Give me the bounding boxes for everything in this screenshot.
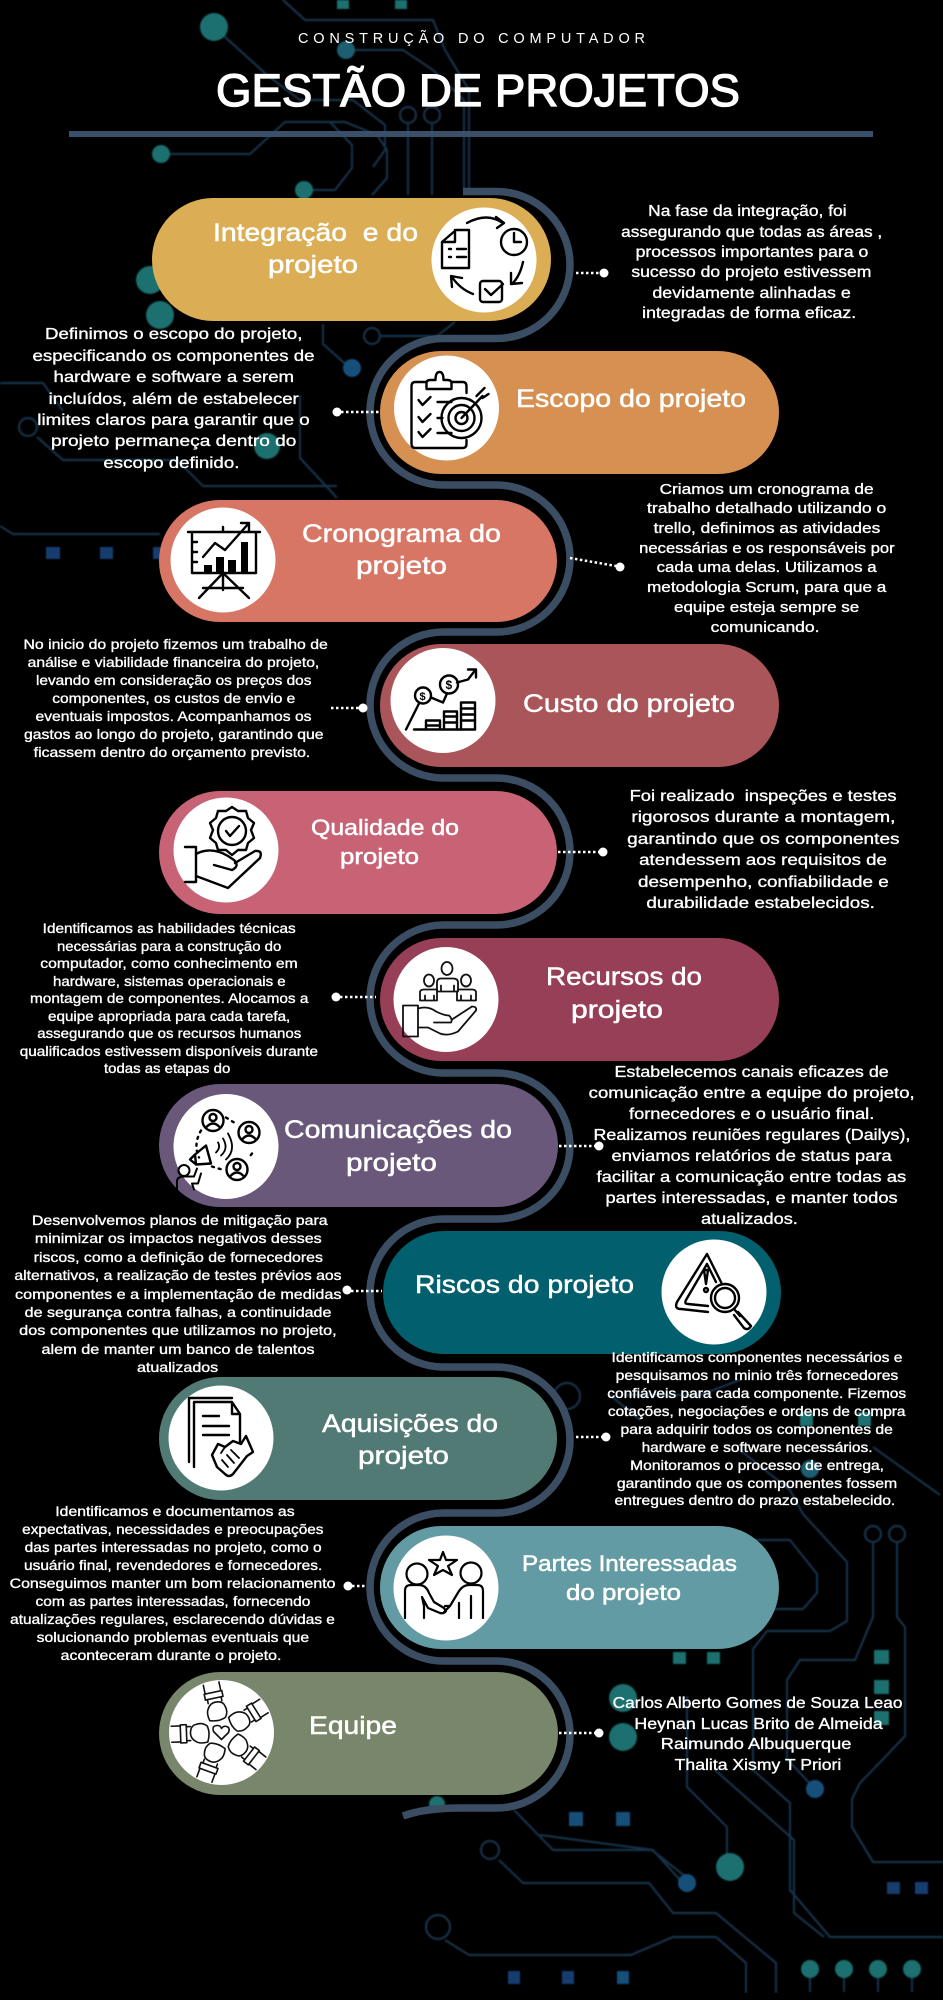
- pill: [152, 198, 551, 321]
- panel: Qualidade: [159, 788, 900, 914]
- description: Estabelecemos canais eficazes de: [614, 1064, 889, 1081]
- team names: Raimundo Albuquerque: [661, 1736, 852, 1753]
- pill heading: [546, 963, 702, 1024]
- panel: Comunicações: [159, 1064, 915, 1228]
- description: usuário final, revendedores e fornecedores.: [24, 1557, 322, 1573]
- description: confiáveis para cada componente. Fizemos: [607, 1385, 906, 1401]
- description: escopo definido.: [103, 455, 239, 472]
- icon: integration cycle: [432, 208, 536, 312]
- description: equipe apropriada para cada tarefa,: [48, 1008, 290, 1024]
- pill: [383, 1231, 781, 1354]
- team names: Heynan Lucas Brito de Almeida: [634, 1716, 883, 1733]
- description: Monitoramos o processo de entrega,: [630, 1457, 884, 1473]
- pill heading: Cronograma do: [302, 520, 501, 548]
- icon: stakeholders handshake and star: [394, 1536, 498, 1640]
- description: [589, 1064, 915, 1228]
- description: componentes, os custos de envio e: [52, 690, 296, 706]
- pill heading: projeto: [356, 552, 447, 580]
- description: [14, 1212, 342, 1375]
- connector: [331, 704, 368, 712]
- description: trello, definimos as atividades: [654, 520, 880, 537]
- description: [20, 920, 318, 1076]
- icon: team on hand: [394, 947, 498, 1052]
- pill heading: projeto: [358, 1442, 449, 1470]
- connector: [558, 848, 608, 856]
- description: entregues dentro do prazo estabelecido.: [614, 1492, 895, 1508]
- connector: [570, 558, 624, 572]
- description: [10, 1503, 336, 1663]
- description: incluídos, além de estabelecer: [49, 391, 299, 408]
- description: minimizar os impactos negativos desses: [35, 1230, 322, 1246]
- connector: [342, 1286, 382, 1294]
- panel: Riscos: [14, 1212, 781, 1375]
- icon: contract handshake: [168, 1386, 274, 1490]
- description: devidamente alinhadas e: [652, 285, 851, 302]
- panel: Integração: [152, 198, 882, 322]
- pill heading: [213, 219, 418, 279]
- icon: money growth: $: [420, 691, 426, 703]
- description: [621, 203, 882, 322]
- description: No inicio do projeto fizemos um trabalho de: [24, 636, 328, 652]
- description: levando em consideração os preços dos: [36, 672, 311, 688]
- description: para adquirir todos os componentes de: [620, 1421, 893, 1437]
- header subtitle: CONSTRUÇÃO DO COMPUTADOR: [298, 30, 645, 47]
- description: hardware e software necessários.: [642, 1439, 872, 1455]
- pill heading: [322, 1410, 498, 1470]
- description: riscos, como a definição de fornecedores: [34, 1249, 323, 1265]
- team names: Carlos Alberto Gomes de Souza Leao: [613, 1695, 903, 1712]
- pill heading: Comunicações do: [284, 1116, 512, 1144]
- description: Identificamos e documentamos as: [55, 1503, 295, 1519]
- description: qualificados estivessem disponíveis durante: [20, 1043, 318, 1059]
- pill heading: Custo do projeto: [523, 690, 735, 718]
- description: desempenho, confiabilidade e: [638, 874, 889, 891]
- pill heading: Equipe: [309, 1712, 397, 1740]
- description: gastos ao longo do projeto, garantindo que: [24, 726, 324, 742]
- connector: [332, 992, 376, 1002]
- pill heading: [311, 815, 459, 869]
- description: alternativos, a realização de testes prévios aos: [14, 1267, 342, 1283]
- pill heading: projeto: [340, 844, 419, 869]
- pill heading: projeto: [346, 1149, 437, 1177]
- description: Definimos o escopo do projeto,: [45, 326, 302, 343]
- description: metodologia Scrum, para que a: [647, 579, 887, 596]
- description: garantindo que os componentes: [627, 831, 900, 848]
- panel: Aquisições: [159, 1349, 906, 1508]
- description: ficassem dentro do orçamento previsto.: [34, 744, 310, 760]
- panel: Escopo: [32, 326, 779, 474]
- description: componentes e a implementação de medidas: [15, 1286, 342, 1302]
- pill: [159, 1672, 558, 1795]
- description: cada uma delas. Utilizamos a: [657, 559, 877, 576]
- panel: Partes Interessadas: [10, 1503, 779, 1663]
- pill heading: Recursos do: [546, 963, 702, 991]
- pill heading: Integração e do: [213, 219, 418, 247]
- description: atualizados.: [701, 1211, 798, 1228]
- connector: [332, 408, 380, 416]
- description: atualizações regulares, esclarecendo dúvidas e: [10, 1611, 335, 1627]
- pill heading: [522, 1551, 737, 1605]
- pill heading: Partes Interessadas: [522, 1551, 737, 1576]
- icon: risk warning and magnifier: [662, 1240, 766, 1344]
- description: Identificamos as habilidades técnicas: [43, 920, 296, 936]
- pill heading: Escopo do projeto: [516, 385, 746, 413]
- description: trabalho detalhado utilizando o: [647, 500, 886, 517]
- pill heading: [302, 520, 501, 580]
- description: facilitar a comunicação entre todas as: [596, 1169, 906, 1186]
- description: processos importantes para o: [636, 244, 868, 261]
- description: Na fase da integração, foi: [648, 203, 847, 220]
- description: com as partes interessadas, fornecendo: [36, 1593, 311, 1609]
- panel: Cronograma: [159, 481, 895, 636]
- description: necessárias para a construção do: [57, 938, 282, 954]
- description: enviamos relatórios de status para: [612, 1148, 892, 1165]
- pill: [380, 351, 779, 474]
- description: comunicando.: [711, 619, 820, 636]
- description: atualizados: [137, 1359, 218, 1375]
- icon: team fists and heart: [169, 1680, 274, 1785]
- description: atendessem aos requisitos de: [639, 852, 887, 869]
- description: solucionando problemas eventuais que: [37, 1629, 309, 1645]
- description: fornecedores e o usuário final.: [629, 1106, 874, 1123]
- icon: clipboard and target: [394, 356, 499, 460]
- pill: [380, 644, 779, 767]
- description: durabilidade estabelecidos.: [646, 895, 875, 912]
- description: assegurando que os recursos humanos: [37, 1025, 301, 1041]
- description: hardware, sistemas operacionais e: [53, 973, 286, 989]
- description: das partes interessadas no projeto, como o: [25, 1539, 322, 1555]
- team names: Thalita Xismy T Priori: [675, 1757, 841, 1774]
- description: computador, como conhecimento em: [40, 955, 298, 971]
- description: Realizamos reuniões regulares (Dailys),: [594, 1127, 910, 1144]
- main title: GESTÃO DE PROJETOS: [216, 65, 740, 116]
- description: aconteceram durante o projeto.: [61, 1647, 281, 1663]
- description: hardware e software a serem: [54, 369, 294, 386]
- description: eventuais impostos. Acompanhamos os: [36, 708, 312, 724]
- pill: [159, 1084, 558, 1207]
- description: [607, 1349, 906, 1508]
- connector: [576, 1432, 610, 1442]
- icon: quality badge on hand: [174, 798, 278, 902]
- description: de segurança contra falhas, a continuidade: [25, 1304, 332, 1320]
- header divider: [69, 131, 873, 137]
- pill: [159, 791, 557, 914]
- pill: [159, 500, 557, 622]
- description: limites claros para garantir que o: [37, 412, 310, 429]
- description: [627, 788, 900, 912]
- icon: communication network: [174, 1094, 278, 1199]
- description: Foi realizado inspeções e testes: [630, 788, 897, 805]
- description: comunicação entre a equipe do projeto,: [589, 1085, 915, 1102]
- pill heading: projeto: [571, 996, 663, 1024]
- connector: [344, 1582, 366, 1590]
- description: Identificamos componentes necessários e: [612, 1349, 903, 1365]
- panel: Recursos: [20, 920, 779, 1076]
- panel: Custo: [24, 636, 779, 767]
- description: especificando os componentes de: [32, 348, 315, 365]
- description: dos componentes que utilizamos no projeto,: [19, 1322, 337, 1338]
- description: cotações, negociações e ordens de compra: [608, 1403, 906, 1419]
- description: garantindo que os componentes fossem: [617, 1475, 897, 1491]
- description: expectativas, necessidades e preocupações: [22, 1521, 323, 1537]
- panel: Equipe: [159, 1672, 903, 1795]
- icon: money growth: [390, 648, 496, 753]
- description: análise e viabilidade financeira do projeto,: [28, 654, 319, 670]
- description: alem de manter um banco de talentos: [42, 1341, 314, 1357]
- description: Criamos um cronograma de: [660, 481, 874, 498]
- pill heading: projeto: [268, 251, 358, 279]
- icon: chart on easel: [170, 508, 276, 612]
- description: equipe esteja sempre se: [674, 599, 859, 616]
- description: partes interessadas, e manter todos: [606, 1190, 898, 1207]
- connector: [576, 268, 608, 278]
- pill heading: Riscos do projeto: [415, 1271, 634, 1299]
- description: [24, 636, 328, 760]
- connector: [559, 1728, 604, 1738]
- description: rigorosos durante a montagem,: [631, 809, 895, 826]
- pill: [159, 1377, 557, 1500]
- pill heading: [284, 1116, 512, 1177]
- pill: [380, 938, 779, 1061]
- pill heading: Qualidade do: [311, 815, 459, 840]
- description: sucesso do projeto estivessem: [631, 264, 871, 281]
- description: integradas de forma eficaz.: [642, 305, 856, 322]
- pill: [380, 1526, 779, 1649]
- pill heading: do projeto: [566, 1580, 681, 1605]
- team names: [613, 1695, 903, 1774]
- description: montagem de componentes. Alocamos a: [30, 990, 309, 1006]
- description: [32, 326, 315, 472]
- connector: [559, 1142, 604, 1150]
- description: Conseguimos manter um bom relacionamento: [10, 1575, 336, 1591]
- pill heading: Aquisições do: [322, 1410, 498, 1438]
- description: Desenvolvemos planos de mitigação para: [32, 1212, 328, 1228]
- description: assegurando que todas as áreas ,: [621, 224, 882, 241]
- serpentine connector ribbon: [370, 192, 570, 1816]
- description: todas as etapas do: [104, 1060, 231, 1076]
- description: necessárias e os responsáveis por: [639, 540, 895, 557]
- description: [639, 481, 895, 636]
- icon: money growth: $: [446, 678, 452, 692]
- description: projeto permaneça dentro do: [51, 433, 297, 450]
- description: pesquisamos no minio três fornecedores: [616, 1367, 898, 1383]
